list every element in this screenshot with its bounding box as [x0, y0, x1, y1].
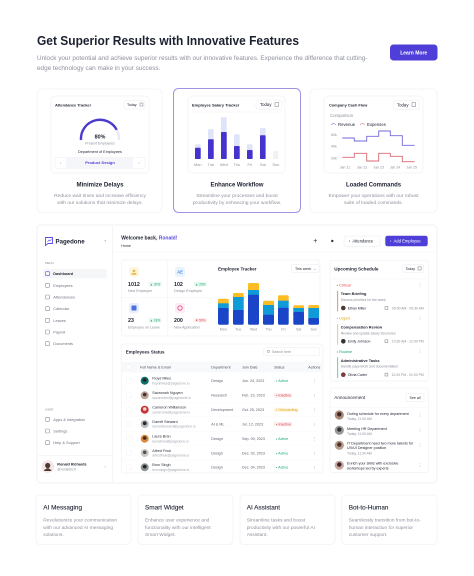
- panel: minimize delays: Department of Employees: [78, 150, 122, 154]
- panel: upcoming schedule: [330, 260, 428, 381]
- announcement 1: [335, 410, 422, 421]
- panel: minimize delays: Attendance Tracker: [55, 102, 92, 108]
- panel: minimize delays: [37, 89, 162, 212]
- user profile: @ronaldrich: [57, 468, 76, 472]
- row: Laura Bran: Sep. 09, 2023: [242, 437, 265, 441]
- stat: employee on leave: Employee on Leave: [128, 325, 160, 329]
- table header: Join Date: [242, 365, 258, 369]
- this week dropdown: [291, 265, 319, 272]
- gauge: [81, 120, 119, 140]
- stacked bar chart: Wed: [250, 327, 257, 331]
- menu items: [43, 269, 107, 346]
- stat: design employee: [174, 267, 207, 293]
- feature card: AI Assistant: Streamline tasks and boost: [247, 518, 306, 524]
- user profile: [41, 460, 106, 473]
- row: Floyd Miles: • Active: [276, 379, 288, 383]
- row: Cameron Williamson: cameronw@pagedone.io: [152, 410, 190, 414]
- feature card: AI Messaging: [36, 495, 131, 544]
- row: Darrell Steward: Darrell Steward: [152, 420, 178, 424]
- stat: new employee: 1012: [128, 282, 140, 288]
- learn more button: Learn More: [400, 51, 427, 57]
- event: compensation review: • Urgent: [337, 317, 351, 321]
- stat: design employee: 102: [174, 282, 183, 288]
- stacked bar chart: Mon: [220, 327, 227, 331]
- line chart: cash flow: 40k: [331, 145, 337, 149]
- row: Darrell Steward: AI & ML: [211, 422, 224, 426]
- panel: enhance workflow: Streamline your processes and boost: [196, 193, 278, 199]
- feature card: AI Assistant: AI Assistant: [247, 505, 280, 512]
- top bar: Home: [121, 244, 131, 248]
- attendance button: ‹ Attendance: [349, 239, 374, 244]
- panel: loaded commands: Company Cash Flow: [329, 102, 368, 108]
- row: Bron Singh: bronsingh@pagedone.io: [152, 468, 189, 472]
- row: Floyd Miles: Floyd Miles: [152, 376, 171, 380]
- event: administrative tasks: [337, 349, 424, 378]
- event: compensation review: ⋮: [418, 316, 422, 321]
- row: Cameron Williamson: ⋮: [312, 408, 316, 412]
- row: Darrell Steward: darrellsteward@pagedone.io: [152, 425, 196, 429]
- line chart: cash flow: 20k: [331, 157, 337, 161]
- panel: loaded commands: [310, 89, 437, 212]
- announcement 3: Today, 11:30 AM: [347, 452, 372, 456]
- row: Bron Singh: Bron Singh: [152, 463, 171, 467]
- row: Laura Bran: laurabran@pagedone.io: [152, 439, 189, 443]
- row: Darrell Steward: [126, 420, 316, 429]
- bar chart: salary: Sat: [260, 162, 267, 167]
- row: Bron Singh: Dec. 04, 2023: [242, 466, 265, 470]
- announcement 4: Enrich your skills with exclusive: [347, 461, 398, 465]
- line chart: cash flow: Jan 23: [373, 166, 384, 170]
- line chart: cash flow: 60k: [331, 133, 337, 137]
- sidebar: [38, 226, 112, 482]
- row: Bron Singh: ⋮: [312, 466, 316, 470]
- bar chart: salary: Sun: [272, 162, 279, 167]
- row: Floyd Miles: ⋮: [312, 379, 316, 383]
- row: Alfred Fnuk: Alfred Fnuk: [152, 449, 171, 453]
- row: Darrell Steward: • Inactive: [276, 422, 291, 426]
- row: Savannah Nguyen: • Inactive: [276, 394, 291, 398]
- event: administrative tasks: • Routine: [337, 350, 352, 354]
- event: compensation review: Review and update salary structures: [341, 331, 396, 335]
- chart legend: [331, 122, 386, 127]
- stat: design employee: ▲ 20%: [195, 282, 206, 286]
- panel: enhance workflow: productivity by enhancing your workflow.: [193, 200, 281, 206]
- panel: enhance workflow: Today: [260, 102, 272, 107]
- panel: employees status table: [121, 344, 323, 473]
- feature card: Smart Widget: Enhance user experience and: [145, 518, 210, 524]
- announcement 4: ⋮: [418, 463, 422, 468]
- line chart: cash flow: [331, 131, 417, 170]
- stacked bar chart: Sat: [296, 327, 301, 331]
- bar chart: salary: Wed: [220, 162, 228, 167]
- row: Alfred Fnuk: ⋮: [312, 451, 316, 455]
- row: Floyd Miles: floydmiles@pagedone.io: [152, 381, 190, 385]
- chart legend: Revenue: [338, 122, 356, 127]
- feature card: Smart Widget: Smart Widget.: [145, 532, 176, 538]
- sidebar: ‹: [105, 238, 107, 243]
- panel: enhance workflow: [174, 88, 300, 212]
- row: Savannah Nguyen: Research: [211, 394, 227, 398]
- panel: loaded commands: Empower your operations with our robust: [328, 193, 419, 199]
- event: team briefing: Ethan Miller: [348, 306, 367, 310]
- stat: new employee: [128, 267, 162, 293]
- event: administrative tasks: Handle paperwork and documentation: [341, 365, 398, 369]
- menu items: Documents: [53, 341, 73, 346]
- user menu items: Help & Support: [53, 440, 81, 445]
- feature card: AI Assistant: productivity with our powerful AI: [247, 525, 315, 531]
- stat: new application: ▼ 50%: [195, 318, 206, 322]
- row: Savannah Nguyen: Savannah Nguyen: [152, 391, 183, 395]
- row: Alfred Fnuk: [126, 449, 316, 458]
- announcement 2: ⋮: [418, 428, 422, 433]
- feature card: Bot-to-Human: [342, 495, 437, 544]
- stacked bar chart: Sun: [310, 327, 317, 331]
- feature card: Bot-to-Human: customer support.: [349, 532, 387, 538]
- event: compensation review: Emily Johnson: [348, 340, 371, 344]
- sidebar: USER: [45, 407, 54, 411]
- row: Savannah Nguyen: Feb. 23, 2023: [242, 394, 265, 398]
- panel: stats and employee tracker: [121, 260, 320, 336]
- panel: loaded commands: Today: [397, 102, 409, 107]
- row: Savannah Nguyen: savannahn@pagedone.io: [152, 396, 191, 400]
- row: Laura Bran: [126, 434, 316, 443]
- panel: announcement: See all: [410, 396, 421, 400]
- row: Alfred Fnuk: Design: [211, 451, 223, 455]
- sidebar: MENU: [45, 261, 54, 265]
- table header: [126, 364, 321, 370]
- user profile: Ronald Richards: [57, 462, 87, 466]
- announcement 1: Today, 11:00 AM: [347, 417, 372, 421]
- feature card: Bot-to-Human: Bot-to-Human: [349, 505, 389, 512]
- row: Alfred Fnuk: Dec. 02, 2023: [242, 451, 265, 455]
- panel: minimize delays: Minimize Delays: [76, 181, 124, 188]
- panel: loaded commands: Comparison: [330, 113, 354, 118]
- event: team briefing: ⋮: [418, 283, 422, 288]
- panel: minimize delays: ›: [138, 160, 140, 165]
- event: team briefing: 09:00 AM - 09:30 AM: [392, 306, 424, 310]
- panel: announcement: [330, 388, 428, 472]
- event: team briefing: • Critical: [337, 283, 351, 287]
- announcement 3: UX/UI Designer position: [347, 446, 386, 450]
- bar chart: salary: [194, 117, 279, 167]
- panel: enhance workflow: Employee Salary Tracker: [192, 102, 240, 108]
- panel: enhance workflow: Enhance Workflow: [210, 181, 264, 188]
- top bar: +: [313, 238, 317, 245]
- stat: design employee: Design Employee: [174, 289, 202, 293]
- panel: loaded commands: Loaded Commands: [346, 181, 401, 188]
- stacked bar chart: [218, 283, 319, 331]
- panel: minimize delays: Today: [127, 103, 137, 107]
- menu items: Calendar: [53, 306, 70, 311]
- row: Darrell Steward: Jul. 12, 2023: [242, 422, 263, 426]
- announcement 2: Meeting HR Department: [347, 427, 387, 431]
- event: team briefing: Discuss priorities for the week: [341, 298, 386, 302]
- feature card: AI Messaging: with our advanced AI messaging: [43, 525, 113, 531]
- user profile: ›: [104, 464, 106, 469]
- announcement 1: ⋮: [418, 413, 422, 418]
- event: administrative tasks: 12:00 PM - 01:00 PM: [392, 373, 424, 377]
- stacked bar chart: Fri: [281, 327, 286, 331]
- row: Alfred Fnuk: alfredfnuk@pagedone.io: [152, 454, 189, 458]
- panel: upcoming schedule: Upcoming Schedule: [334, 266, 379, 271]
- user menu items: [46, 417, 85, 445]
- row: Floyd Miles: Design: [211, 379, 223, 383]
- announcement 3: [335, 441, 422, 456]
- line chart: cash flow: Jan 22: [357, 166, 367, 170]
- menu items: Leaves: [53, 318, 66, 323]
- announcement 2: [335, 426, 422, 436]
- feature card: AI Messaging: Revolutionize your communication: [43, 518, 117, 524]
- stat: employee on leave: ▲ 18%: [150, 318, 160, 322]
- stat: design employee: AE: [177, 270, 183, 274]
- announcement 2: Today, 11:00 AM: [347, 432, 372, 436]
- learn more button: [390, 44, 438, 60]
- chart legend: Expenses: [367, 122, 386, 127]
- logo: Pagedone: [56, 238, 85, 245]
- stacked bar chart: Thu: [265, 327, 272, 331]
- row: Bron Singh: Design: [211, 466, 223, 470]
- bar chart: salary: Mon: [194, 162, 202, 167]
- row: Cameron Williamson: Cameron Williamson: [152, 406, 186, 410]
- intro text: Unlock your potential and achieve superior results with our innovative features. Experience the difference that cutting-: [37, 55, 367, 62]
- row: Bron Singh: • Active: [276, 466, 288, 470]
- stat: employee on leave: [128, 303, 162, 329]
- user menu items: Apps & Integration: [53, 417, 85, 422]
- row: Cameron Williamson: Oct. 25, 2023: [242, 408, 264, 412]
- feature card: AI Assistant: Assistant.: [247, 532, 268, 538]
- event: compensation review: 10:30 AM - 12:00 PM: [392, 340, 424, 344]
- announcement 3: IT Department need two more talents for: [347, 442, 414, 446]
- bar chart: salary: Thu: [233, 162, 240, 167]
- row: Laura Bran: • Active: [276, 437, 288, 441]
- row: Cameron Williamson: • Onboarding: [276, 408, 298, 412]
- event: compensation review: Compensation Review: [341, 324, 383, 330]
- stat: new application: 200: [174, 318, 183, 324]
- event: administrative tasks: Olivia Carter: [348, 373, 368, 377]
- row: Floyd Miles: [126, 376, 316, 385]
- panel: employees status table: Employees Status: [126, 350, 165, 355]
- dashboard frame: [37, 225, 437, 483]
- row: Laura Bran: Design: [211, 437, 223, 441]
- search box: [264, 348, 320, 356]
- row: Laura Bran: ⋮: [312, 437, 316, 441]
- panel: minimize delays: Product Design: [85, 160, 115, 165]
- panel: minimize delays: Reduce wait times and increase efficiency: [54, 193, 146, 199]
- line chart: cash flow: Jan 24: [390, 166, 400, 170]
- event: administrative tasks: ⋮: [418, 349, 422, 354]
- top bar: [113, 235, 436, 252]
- panel: minimize delays: ‹: [60, 160, 62, 165]
- panel: minimize delays: with our solutions that minimize delays.: [57, 200, 143, 206]
- feature card: Smart Widget: [138, 495, 233, 544]
- add employee button: [385, 236, 428, 246]
- top bar: Welcome back, Ronald!: [121, 235, 178, 241]
- feature card: Bot-to-Human: human interaction for superior: [349, 525, 413, 531]
- table header: Status: [274, 365, 285, 369]
- menu items: Payroll: [53, 330, 65, 334]
- search box: Search here: [272, 350, 291, 354]
- announcement 4: workshops led by experts: [347, 466, 389, 470]
- panel: minimize delays: 80%: [95, 135, 106, 141]
- event: team briefing: Team Briefing: [341, 291, 367, 296]
- this week dropdown: This week: [295, 267, 311, 271]
- event: team briefing: [337, 283, 424, 311]
- row: Cameron Williamson: [126, 406, 316, 414]
- intro text: [37, 55, 367, 72]
- row: Bron Singh: [126, 463, 316, 472]
- row: Alfred Fnuk: • Active: [276, 451, 288, 455]
- logo: [46, 238, 85, 246]
- user menu items: Settings: [53, 428, 67, 434]
- panel: announcement: Announcement: [334, 395, 366, 400]
- table header: Department: [211, 365, 231, 369]
- row: Savannah Nguyen: [126, 391, 316, 400]
- row: Floyd Miles: Jun. 24, 2023: [242, 379, 264, 383]
- stat: new application: New Application: [174, 325, 200, 329]
- feature card: Smart Widget: Smart Widget: [145, 505, 184, 512]
- row: Laura Bran: Laura Bran: [152, 434, 171, 438]
- table header: Actions: [308, 365, 321, 369]
- announcement 3: ⋮: [418, 443, 422, 448]
- line chart: cash flow: Jan 21: [340, 166, 350, 170]
- add employee button: ‹ Add Employee: [390, 239, 421, 244]
- menu items: Attendances: [53, 294, 75, 300]
- feature card: AI Messaging: solutions.: [43, 532, 64, 538]
- stat: new application: [174, 303, 207, 329]
- title: Get Superior Results with Innovative Features: [37, 34, 299, 48]
- table header: Full Name & Email: [140, 365, 171, 369]
- intro text: edge technology can make in your success.: [37, 65, 161, 72]
- menu items: Employees: [53, 283, 73, 288]
- bar chart: salary: Fri: [248, 162, 252, 167]
- row: Darrell Steward: ⋮: [312, 422, 316, 426]
- feature card: AI Messaging: AI Messaging: [43, 505, 82, 512]
- attendance button: [344, 236, 380, 246]
- panel: loaded commands: suite of loaded commands.: [344, 200, 403, 206]
- event: administrative tasks: Administrative Tasks: [341, 358, 380, 363]
- event: compensation review: [337, 316, 424, 345]
- employee tracker heading: Employee Tracker: [218, 266, 257, 271]
- feature card: Smart Widget: functionality with our intelligent: [145, 525, 211, 531]
- stat: new employee: ▲ 30%: [150, 282, 160, 286]
- panel: upcoming schedule: Today: [406, 267, 415, 271]
- this week dropdown: ⌄: [314, 267, 316, 271]
- announcement 4: [335, 461, 422, 470]
- stat: employee on leave: 23: [128, 318, 134, 324]
- line chart: cash flow: Jan 25: [406, 166, 417, 170]
- announcement 1: Outing schedule for every department: [347, 412, 409, 416]
- feature card: Bot-to-Human: Seamlessly transition from bot-to-: [349, 518, 421, 524]
- menu items: Dashboard: [53, 272, 74, 276]
- stat: new employee: New Employee: [128, 289, 152, 293]
- row: Savannah Nguyen: ⋮: [312, 394, 316, 398]
- panel: minimize delays: Present Employees: [85, 142, 115, 146]
- feature card: AI Assistant: [240, 495, 335, 544]
- row: Cameron Williamson: Development: [211, 408, 233, 412]
- stacked bar chart: Tue: [235, 327, 241, 331]
- bar chart: salary: Tue: [208, 162, 214, 167]
